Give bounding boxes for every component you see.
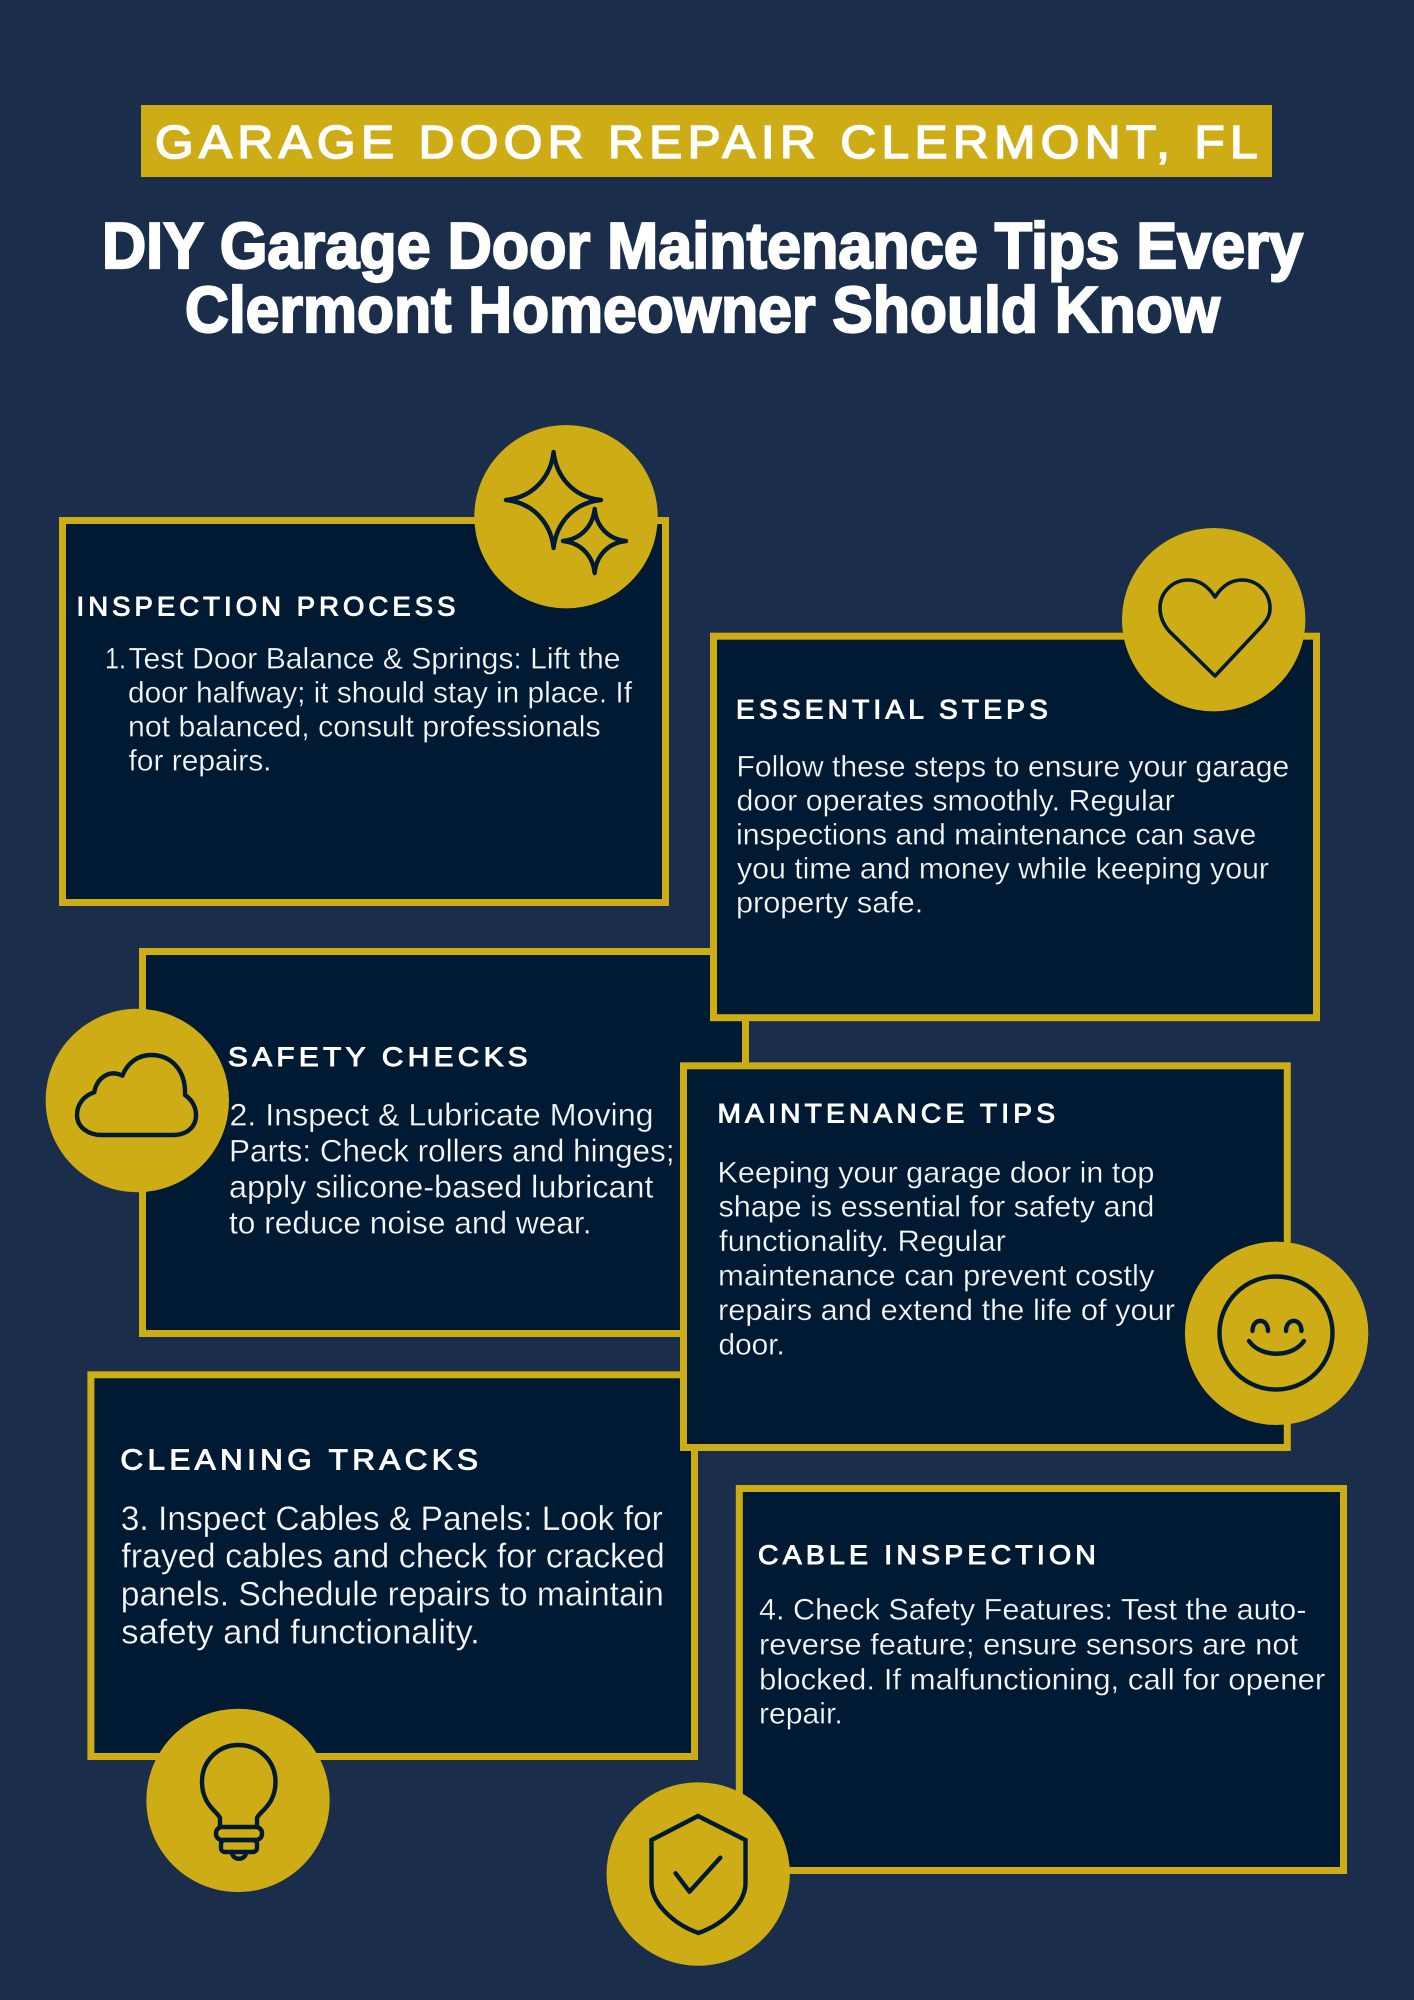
- panel: safety checks: [46, 952, 746, 1334]
- body text: step 2: Parts: Check rollers and hinges;: [229, 1133, 674, 1169]
- icon: sparkles: [474, 425, 658, 608]
- heading: safety checks: SAFETY CHECKS: [228, 1042, 532, 1072]
- panel: maintenance tips: [684, 1066, 1368, 1448]
- icon: smiling face: [1185, 1242, 1368, 1425]
- body text: step 2: 2. Inspect & Lubricate Moving: [230, 1097, 654, 1133]
- body text: maintenance tips: maintenance can prevent costly: [718, 1259, 1154, 1292]
- body text: maintenance tips: functionality. Regular: [719, 1225, 1006, 1258]
- body text: essential steps: inspections and maintenance can save: [736, 819, 1256, 852]
- body text: step 4: reverse feature; ensure sensors are not: [759, 1628, 1299, 1661]
- panel: cable inspection: [606, 1488, 1344, 1966]
- body text: maintenance tips: door.: [718, 1328, 785, 1361]
- body text: step 1: 1.: [105, 642, 126, 675]
- body text: essential steps: property safe.: [736, 887, 923, 920]
- panel: essential steps: [714, 528, 1316, 1018]
- body text: step 3: safety and functionality.: [121, 1614, 480, 1652]
- title: Clermont Homeowner Should Know: [185, 273, 1220, 346]
- body text: step 4: 4. Check Safety Features: Test the auto-: [759, 1593, 1306, 1626]
- body text: step 2: [229, 1097, 674, 1240]
- heading: essential steps: ESSENTIAL STEPS: [736, 695, 1052, 725]
- body text: maintenance tips: repairs and extend the life of your: [718, 1294, 1175, 1327]
- heading: cleaning tracks: CLEANING TRACKS: [120, 1444, 482, 1476]
- panel: cleaning tracks: [91, 1375, 694, 1892]
- body text: step 2: to reduce noise and wear.: [229, 1204, 592, 1240]
- body text: maintenance tips: Keeping your garage door in top: [718, 1157, 1154, 1190]
- body text: step 3: frayed cables and check for cracked: [121, 1538, 665, 1576]
- heading: maintenance tips: MAINTENANCE TIPS: [718, 1098, 1059, 1128]
- banner: [141, 105, 1272, 177]
- body text: step 1: [105, 642, 633, 778]
- body text: essential steps: [736, 751, 1289, 920]
- icon: cloud: [46, 1009, 229, 1192]
- title: DIY Garage Door Maintenance Tips Every: [102, 209, 1303, 282]
- body text: maintenance tips: shape is essential for safety and: [718, 1191, 1154, 1224]
- body text: step 4: repair.: [759, 1697, 843, 1730]
- body text: maintenance tips: [718, 1157, 1175, 1361]
- body text: essential steps: you time and money while keeping your: [737, 853, 1269, 886]
- panel: inspection process: [62, 425, 666, 902]
- banner: GARAGE DOOR REPAIR CLERMONT, FL: [155, 116, 1263, 168]
- icon: light bulb: [146, 1709, 330, 1892]
- heading: cable inspection: CABLE INSPECTION: [758, 1540, 1100, 1570]
- title: [102, 209, 1303, 346]
- icon: shield with check: [606, 1782, 790, 1966]
- body text: step 1: for repairs.: [128, 745, 272, 778]
- body text: step 1: not balanced, consult professionals: [128, 710, 601, 743]
- icon: heart: [1122, 528, 1305, 711]
- body text: step 4: [759, 1593, 1325, 1730]
- body text: essential steps: Follow these steps to ensure your garage: [736, 751, 1289, 784]
- body text: step 2: apply silicone-based lubricant: [229, 1169, 654, 1205]
- body text: step 3: 3. Inspect Cables & Panels: Look for: [121, 1500, 663, 1538]
- body text: step 3: [121, 1500, 665, 1652]
- body text: step 4: blocked. If malfunctioning, call for opener: [759, 1663, 1325, 1696]
- body text: step 1: door halfway; it should stay in place. If: [128, 676, 633, 709]
- body text: step 3: panels. Schedule repairs to maintain: [121, 1576, 664, 1614]
- body text: essential steps: door operates smoothly. Regular: [736, 785, 1175, 818]
- body text: step 1: Test Door Balance & Springs: Lift the: [128, 642, 620, 675]
- heading: inspection process: INSPECTION PROCESS: [76, 592, 460, 622]
